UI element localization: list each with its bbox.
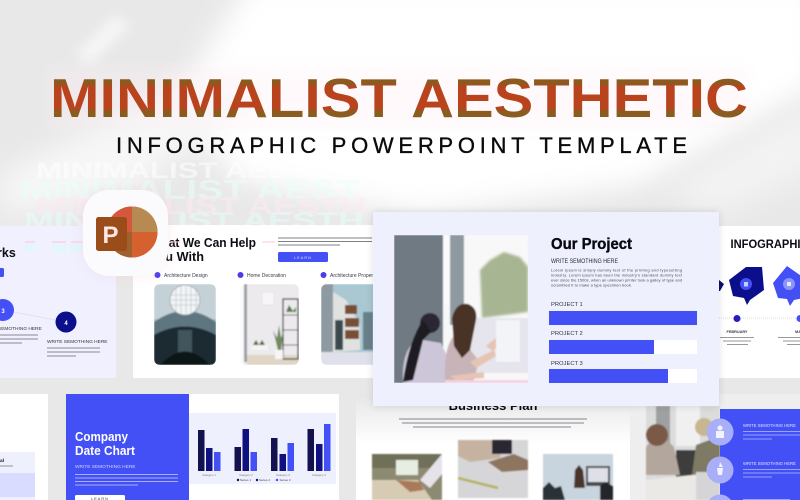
body copy: scrambled it to make a type specimen book. [551, 282, 632, 288]
service labels: Architecture Property [330, 273, 377, 279]
compression ghost dashes over the upper slides [25, 242, 275, 248]
blue services panel [706, 409, 800, 500]
month labels [727, 330, 800, 334]
panel: left bottom slide: al [0, 458, 4, 464]
dark pentagon icon [719, 267, 764, 305]
heading, partly covered by the project slide: Business Plan [449, 398, 537, 413]
service labels [154, 272, 373, 278]
month labels: FEBRUARY [727, 330, 748, 334]
service item 1: WRITE SEMOTHING HERE [743, 423, 796, 428]
bar chart: four categories, three series: Category 1 [202, 473, 216, 477]
timeline markers [734, 315, 800, 322]
slide heading: You With [150, 250, 204, 264]
bar chart: four categories, three series: Category 2 [239, 473, 253, 477]
photo: glass dome [154, 284, 216, 365]
chart legend: Series 1 [240, 478, 251, 482]
step 4 marker: 4 [64, 321, 68, 327]
photo: interior room [240, 284, 299, 365]
body copy: industry. Lorem Ipsum has been the industry's standard dummy text [551, 272, 683, 278]
chart legend: Series 3 [280, 478, 291, 482]
service labels: Home Decoration [247, 273, 286, 279]
photo: desk with laptop [372, 454, 442, 500]
bar chart: project progress: PROJECT 1 [551, 302, 583, 308]
panel: company date chart slide [66, 394, 339, 500]
photo: paperwork [458, 440, 528, 498]
subheading: WRITE SEMOTHING HERE [551, 258, 618, 265]
icon: PowerPoint app badge: P [102, 222, 119, 249]
body copy [551, 268, 683, 288]
compression ghost text behind the slides: MINIMALIST AEST [20, 174, 360, 205]
service item 2: WRITE SEMOTHING HERE [743, 461, 796, 466]
step 4 marker [56, 312, 76, 332]
subtitle: INFOGRAPHIC POWERPOINT TEMPLATE [116, 133, 687, 158]
chart legend: Series 2 [259, 478, 270, 482]
compression ghost text behind the slides: MINIMALIST AESTH [24, 208, 364, 233]
subheading: WRITE SEMOTHING HERE [75, 464, 136, 470]
photo: meeting room presentation [543, 454, 613, 500]
panel: what we can help you with slide [133, 225, 381, 378]
bar chart: project progress: PROJECT 2 [551, 331, 583, 337]
slide heading [166, 238, 256, 261]
panel: our project slide [373, 212, 719, 406]
bar chart: four categories, three series: Category 4 [312, 473, 326, 477]
photo: team at table [646, 406, 720, 500]
intro copy and button [278, 238, 372, 262]
bar chart: four categories, three series: Category 3 [276, 473, 290, 477]
service labels: Architecture Design [164, 273, 208, 279]
heading [75, 430, 136, 458]
intro copy and button: LEARN [294, 256, 312, 260]
panel: how it works slide [0, 226, 116, 378]
body copy [399, 419, 587, 427]
title: MINIMALIST AESTHETIC [50, 67, 748, 129]
panel: left bottom slide [0, 394, 48, 500]
body copy [75, 474, 178, 485]
icon: PowerPoint app badge [83, 190, 168, 276]
chart legend [237, 478, 291, 482]
photo: two women at a desk [394, 235, 528, 383]
bar chart: project progress [549, 302, 697, 383]
panel: team photo and services slide [630, 394, 800, 500]
compression ghost text behind the slides: MINIMALIST AESTHETIC [36, 158, 401, 183]
blue pentagon icon [773, 266, 800, 306]
compression ghost text behind the slides [20, 158, 401, 233]
panel: infographic timeline slide [719, 226, 800, 378]
heading: Our Project [551, 236, 632, 253]
body copy: ever since the 1500s, when an unknown printer took a galley of type and [551, 278, 682, 282]
slide heading: What We Can Help [150, 236, 256, 250]
heading: Company [75, 430, 128, 444]
body copy: Lorem Ipsum is simply dummy text of the printing and typesetting [551, 268, 682, 272]
heading: Date Chart [75, 444, 136, 458]
bar chart: four categories, three series [189, 413, 336, 484]
bar chart: project progress: PROJECT 3 [551, 361, 583, 367]
panel: business plan slide [356, 394, 630, 500]
panel: how it works slide: WRITE SEMOTHING HERE [47, 339, 108, 345]
button [75, 495, 125, 500]
step 3 marker [0, 299, 14, 321]
step 3 marker: 3 [1, 309, 5, 315]
service item 3 [706, 494, 790, 500]
photo: apartment building [321, 284, 373, 365]
compression ghost text behind the slides: MINIMALIST AESTH [36, 193, 366, 220]
